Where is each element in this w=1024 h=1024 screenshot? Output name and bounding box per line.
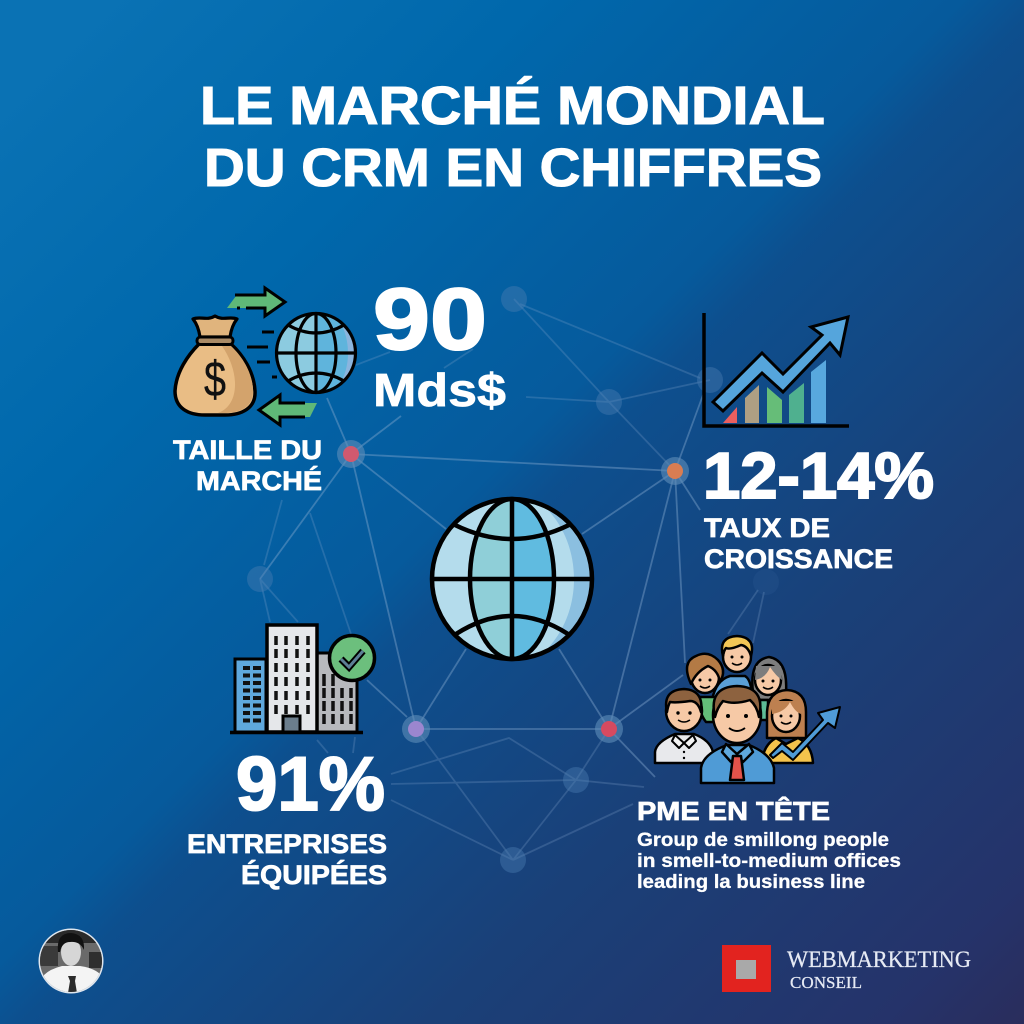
network background: [247, 286, 779, 873]
text block: description: in smell-to-medium offices: [637, 850, 901, 872]
icon: money bag: [175, 316, 255, 415]
stat: 90 Mds$: [373, 271, 506, 416]
logo: Webmarketing Conseil: [722, 945, 971, 992]
icon: small globe: [276, 313, 356, 393]
icon: money bag: $: [204, 351, 226, 407]
building: middle: [267, 625, 317, 732]
heading: SMEs leading: PME EN TÊTE: [637, 796, 830, 826]
building: left: [235, 659, 266, 732]
building baseline: [230, 731, 363, 734]
logo wordmark: [787, 947, 971, 992]
label: equipped companies: ÉQUIPÉES: [241, 859, 387, 890]
icon: office buildings with check badge: [230, 625, 374, 732]
central globe icon: [432, 499, 592, 659]
person: blond: [712, 636, 752, 700]
label: growth rate: TAUX DE: [704, 513, 830, 543]
chart axes: [704, 313, 849, 426]
icon: top arrow: [227, 288, 285, 316]
chart arrow: [713, 317, 848, 411]
stat: 91%: 91%: [236, 742, 385, 827]
stat: 90 Mds$: 90: [373, 271, 487, 368]
text block: description: [637, 829, 901, 893]
icon: group of people with arrow: [655, 636, 840, 783]
label: equipped companies: ENTREPRISES: [187, 829, 387, 859]
text block: description: Group de smillong people: [637, 829, 889, 851]
stat: 12-14%: 12-14%: [703, 439, 934, 512]
logo wordmark: CONSEIL: [790, 973, 862, 992]
title: LE MARCHÉ MONDIAL: [200, 76, 825, 136]
title: DU CRM EN CHIFFRES: [204, 138, 822, 198]
building: right: [317, 653, 357, 732]
text block: description: leading la business line: [637, 871, 865, 893]
person: curly hair: [687, 654, 723, 722]
title: [200, 76, 825, 198]
avatar portrait: [38, 928, 104, 995]
label: market size: [173, 435, 322, 496]
icon: speed lines: [247, 332, 277, 377]
icon: people arrow: [770, 707, 840, 760]
logo wordmark: WEBMARKETING: [787, 947, 971, 972]
logo mark: [722, 945, 771, 992]
label: equipped companies: [187, 829, 387, 890]
panel: SMEs leading: [637, 636, 901, 893]
panel: market size: [173, 271, 506, 496]
panel: growth rate: [703, 313, 934, 574]
label: market size: TAILLE DU: [173, 435, 322, 465]
person: right woman: [762, 690, 813, 763]
icon: check badge: [330, 636, 374, 680]
person: grey hair: [752, 657, 786, 720]
stat: 90 Mds$: Mds$: [373, 364, 506, 416]
panel: equipped companies: [187, 625, 387, 890]
label: growth rate: [704, 513, 893, 574]
person: centre man: [701, 686, 774, 783]
icon: money bag, globe and arrows: [175, 288, 356, 425]
icon: bottom arrow: [259, 395, 317, 425]
chart bars: [723, 360, 826, 423]
label: growth rate: CROISSANCE: [704, 544, 893, 574]
label: market size: MARCHÉ: [196, 465, 322, 496]
person: left man: [655, 689, 713, 763]
icon: growth chart: [704, 313, 849, 426]
